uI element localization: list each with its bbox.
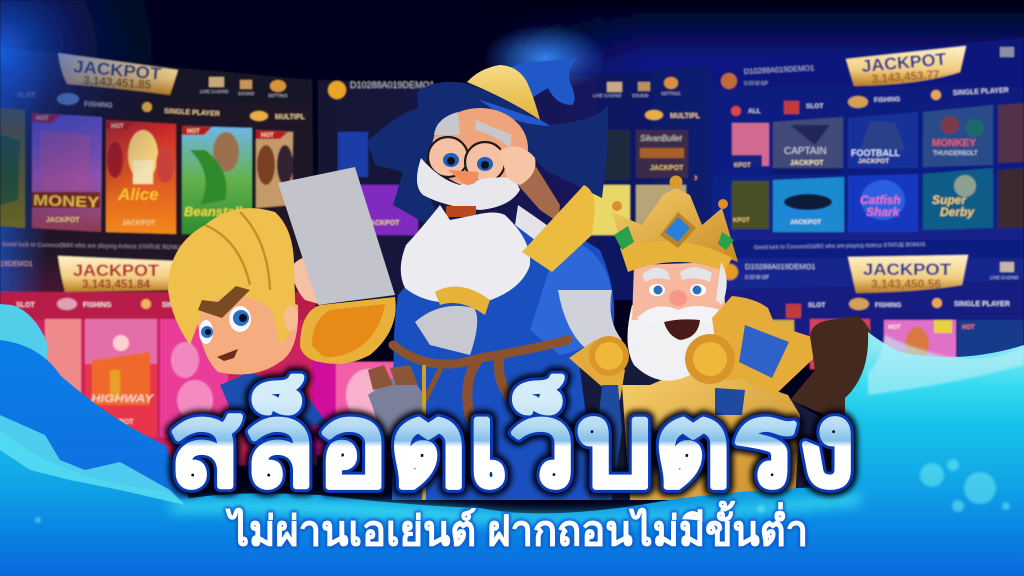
game cards right bottom row: KPOT [733, 218, 750, 224]
game cards right top row [732, 103, 1024, 174]
subtitle glow: ไม่ผ่านเอเย่นต์ ฝากถอนไม่มีขั้นต่ำ [225, 501, 808, 554]
top menu icons left: SOUND [238, 91, 255, 96]
blue glow top left [0, 0, 190, 240]
king crown [612, 176, 738, 272]
king eyes [649, 284, 706, 296]
game cards right top row: THUNDERBOLT [933, 151, 978, 157]
game cards right top row: FOOTBALL [851, 148, 900, 158]
middle cards [338, 130, 698, 235]
glow behind wizard hat [483, 24, 607, 92]
boy eyebrows [198, 286, 250, 318]
wave right body [845, 332, 1024, 576]
wave left crest [0, 304, 48, 362]
wizard body robe [392, 225, 614, 500]
hot tags [32, 113, 288, 139]
wizard hair [434, 112, 512, 148]
king moustache [637, 306, 732, 324]
nav tabs right top: SINGLE PLAYER [953, 87, 1009, 97]
wizard glasses [428, 137, 505, 182]
wizard nose [448, 170, 478, 185]
nav tabs left top: FISHING [84, 101, 113, 110]
wizard white hair side [515, 205, 548, 240]
paper [278, 167, 395, 305]
nav tabs right lower [786, 298, 1010, 318]
jackpot banner right top: JACKPOT [861, 50, 948, 76]
boy hair [168, 208, 296, 345]
king hair side [716, 262, 727, 305]
game cards left top row: HOT [187, 129, 200, 135]
red nav band left lower: FISHING [83, 302, 112, 309]
title glow: สล็อตเว็บตรง [168, 374, 856, 512]
game cards right bottom row: Catfish [860, 193, 901, 207]
wizard gold ring [435, 287, 490, 315]
user badge right top: 0.00 M GP [744, 81, 769, 87]
panel: middle game lobby [318, 65, 712, 300]
nav tabs right lower: SLOT [808, 302, 825, 309]
king mouth [664, 319, 700, 340]
wizard hat brim [367, 82, 608, 222]
game cards left top row: JACKPOT [122, 220, 156, 227]
top menu icons left: SETTING [268, 93, 288, 98]
jackpot banner left top: 3,143,451.85 [83, 73, 152, 92]
nav tabs left top: MULTIPL [275, 114, 306, 121]
water wave bottom [0, 304, 1024, 576]
game cards left lower row: JACKPOT [100, 419, 134, 426]
jackpot banner left top [58, 53, 178, 95]
nav tabs right lower: FISHING [875, 302, 901, 309]
game cards right top row: JACKPOT [858, 158, 889, 165]
panel: middle game lobby: D10288A019DEMO1 [350, 80, 435, 90]
panel: right game lobby [712, 38, 1024, 380]
boy face [196, 289, 298, 374]
boy mouth [217, 349, 238, 361]
middle cards: › [694, 172, 698, 184]
title outline: สล็อตเว็บตรง [168, 374, 856, 512]
red nav band left lower: SLOT [16, 302, 35, 309]
user badge right lower: 0.00 M GP [745, 275, 770, 281]
game cards left top row: HOT [36, 116, 49, 122]
middle top menu: SETTING [661, 91, 681, 96]
wizard scarf [415, 306, 477, 355]
king glove [790, 316, 873, 418]
top menu icons left [200, 77, 288, 98]
subtitle: ไม่ผ่านเอเย่นต์ ฝากถอนไม่มีขั้นต่ำ [225, 501, 808, 554]
jackpot banner right top [846, 46, 966, 86]
middle top menu: SOUND [632, 93, 649, 98]
game cards right top row: MONKEY [932, 138, 976, 149]
game cards right bottom row [732, 168, 1024, 232]
king gold chest plate [622, 370, 800, 500]
wizard hat yellow band [467, 65, 540, 120]
wizard left gold cuff [300, 297, 396, 364]
game cards right bottom row: JACKPOT [790, 219, 821, 226]
wizard gold cuff [522, 185, 595, 272]
nav tabs left top [17, 92, 306, 121]
wizard raised hand and arm [518, 165, 560, 222]
panel: left game lobby [0, 47, 316, 460]
wizard face [432, 108, 528, 188]
wave foam left [0, 415, 185, 505]
game cards right top row: JACKPOT [790, 160, 824, 167]
game cards left lower row: HIGHWAY [91, 393, 155, 405]
user badge right lower: D10288A019DEMO1 [745, 262, 815, 271]
sky glow right [497, 0, 1024, 78]
game cards left top row: Alice [117, 185, 159, 204]
nav tabs right lower: SINGLE PLAYER [954, 301, 1010, 308]
ticker right: Good luck to Cxxxxxx01M62 who are playing Azteca STATUE BONUS [754, 242, 926, 251]
game cards right bottom row: Shark [866, 205, 901, 219]
game cards right lower row: HOT [888, 325, 901, 331]
boy character [168, 208, 328, 430]
king torso dark [578, 355, 830, 500]
game cards left top row: JACKPOT [46, 217, 80, 224]
boy eyes [199, 306, 251, 344]
king face [632, 262, 726, 320]
nav tabs left top: SINGLE PLAYER [164, 108, 220, 118]
middle top menu: MULTIPL [670, 113, 701, 120]
jackpot banner left lower: JACKPOT [73, 261, 160, 280]
jackpot banner right lower: JACKPOT [863, 260, 952, 279]
middle cards: JACKPOT [366, 220, 400, 227]
wizard moustache [417, 158, 520, 210]
game cards right bottom row: GREAT BLUE [780, 208, 828, 217]
jackpot banner left lower: 19DEMO1 [0, 261, 33, 268]
game cards left top row [0, 108, 293, 236]
user badge right top: D10288A019DEMO1 [744, 63, 814, 76]
game cards right top row: CAPTAIN [784, 146, 827, 157]
king arm armour [712, 296, 818, 395]
middle cards: SilvanBullet [640, 134, 683, 143]
jackpot banner right top: 3,143,453.77 [871, 67, 940, 86]
king brows [642, 267, 712, 282]
nav tabs left top: SLOT [17, 92, 36, 99]
wizard mouth shadow [446, 206, 476, 217]
wizard hand holding paper [290, 257, 322, 305]
user badge right lower: LIVE CASINO [990, 275, 1019, 280]
boy ear [284, 305, 298, 331]
wizard beard [401, 205, 530, 302]
wave foam right [868, 335, 1024, 395]
game cards left top row: MONEY [33, 192, 99, 211]
red nav band left lower: SINGLE [162, 302, 188, 309]
ticker left: Good luck to Cxxxxxx0MI4 who are playing Azteca STATUE BONUS [2, 242, 184, 251]
user badge right lower [722, 47, 1019, 281]
middle top menu [593, 77, 701, 120]
wizard character [278, 58, 622, 500]
title: สล็อตเว็บตรง [168, 374, 856, 512]
user badge right top [721, 63, 814, 89]
top menu icons left: LIVE CASINO [200, 89, 229, 94]
middle cards: JACKPOT [650, 165, 684, 172]
middle top menu: LIVE CASINO [593, 93, 622, 98]
jackpot banner left lower: 3,143,451.84 [82, 277, 150, 291]
game cards right top row: KPOT [734, 163, 751, 169]
king left gold shoulder [569, 340, 625, 400]
wave left body [0, 340, 190, 576]
king nose [669, 290, 687, 306]
jackpot banner right lower [848, 255, 968, 293]
nav tabs right top [731, 87, 1009, 116]
wizard white right sleeve lining [558, 290, 622, 349]
red nav band left lower [0, 292, 316, 322]
wizard rope belt [393, 340, 568, 418]
game cards right bottom row: Derby [940, 205, 975, 219]
boy collar [220, 372, 328, 430]
game cards right lower row [764, 319, 1024, 380]
king beard [627, 305, 722, 381]
game cards left lower row [0, 319, 401, 465]
game cards right lower row: HOT [962, 325, 975, 331]
game cards left top row: HOT [261, 133, 274, 139]
game cards left top row: HOT [111, 124, 124, 130]
wizard hat tip [490, 58, 578, 105]
nav tabs right top: ALL [748, 108, 761, 115]
game cards left top row: Beanstalk [184, 204, 246, 219]
jackpot banner right lower: 3,143,450.56 [871, 277, 941, 291]
wizard pouch [368, 378, 425, 450]
nav tabs right top: FISHING [874, 96, 900, 104]
king blue tunic [590, 385, 622, 500]
wave cyan highlight band [170, 494, 860, 523]
middle cards: JACK [576, 163, 598, 172]
king character [569, 176, 873, 500]
king arm disc [685, 334, 735, 384]
bubbles [35, 459, 1010, 523]
king left shoulder disc [589, 336, 629, 376]
jackpot banner left lower [0, 256, 176, 292]
jackpot banner left top: JACKPOT [73, 57, 163, 84]
wave main body [0, 430, 900, 576]
game cards right bottom row: Super [932, 193, 967, 207]
nav tabs right top: SLOT [806, 103, 823, 110]
